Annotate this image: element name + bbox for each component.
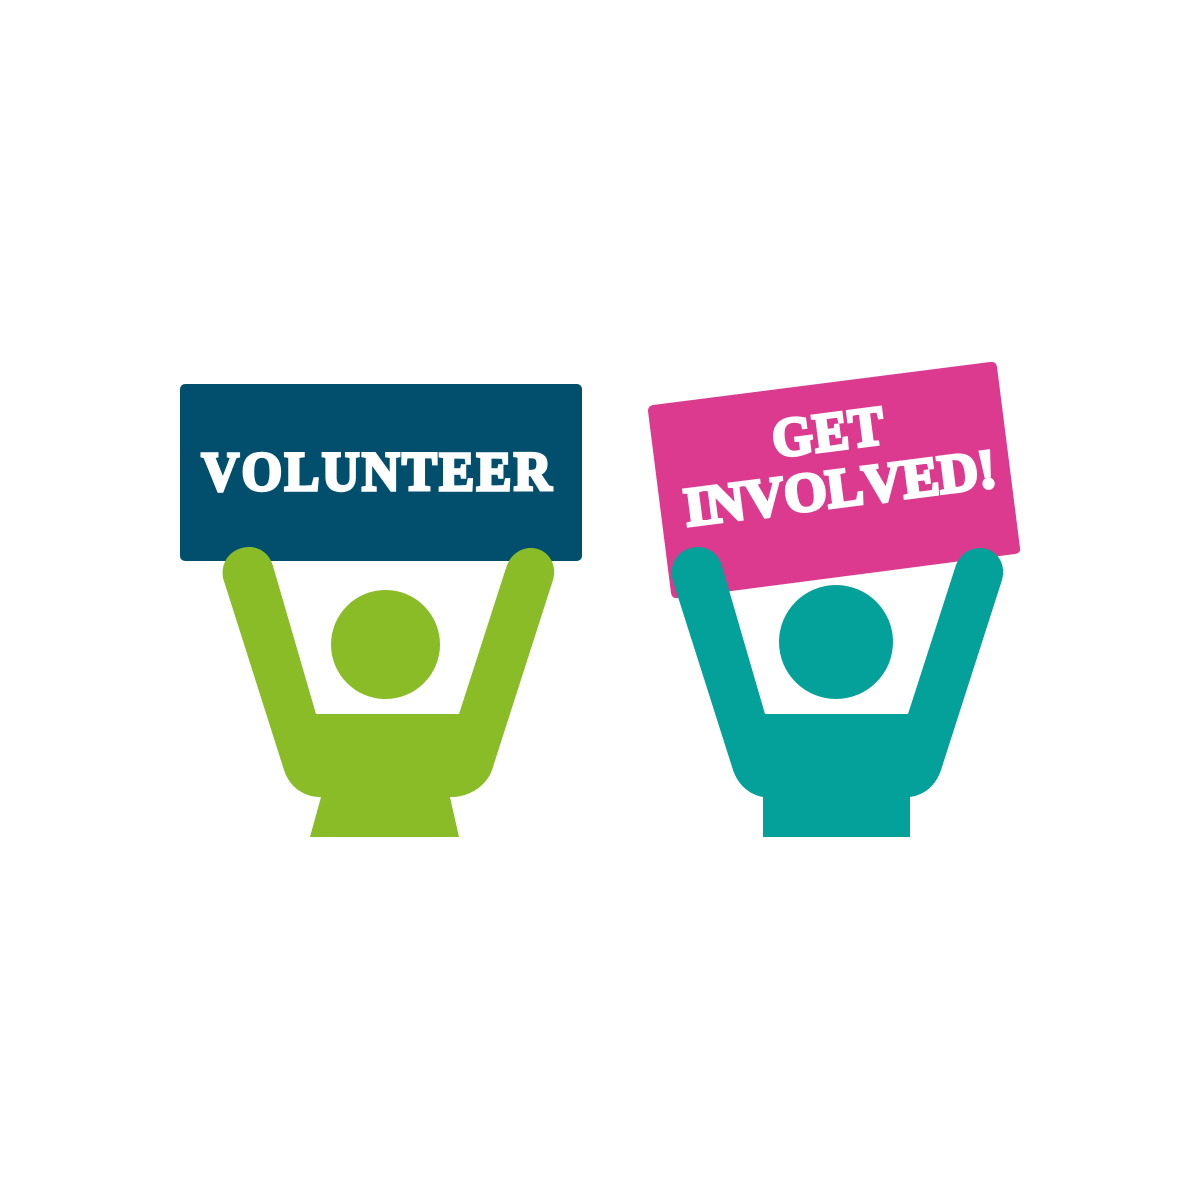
heading: volunteer: VOLUNTEER [202, 441, 553, 502]
icon: teal person [672, 547, 1003, 837]
panel: get involved sign [648, 362, 1020, 598]
heading: get involved [673, 381, 1000, 538]
panel: volunteer sign [180, 384, 582, 561]
heading: get involved: GET [768, 394, 887, 470]
heading: get involved: INVOLVED! [680, 437, 1000, 538]
icon: green person [223, 547, 554, 837]
